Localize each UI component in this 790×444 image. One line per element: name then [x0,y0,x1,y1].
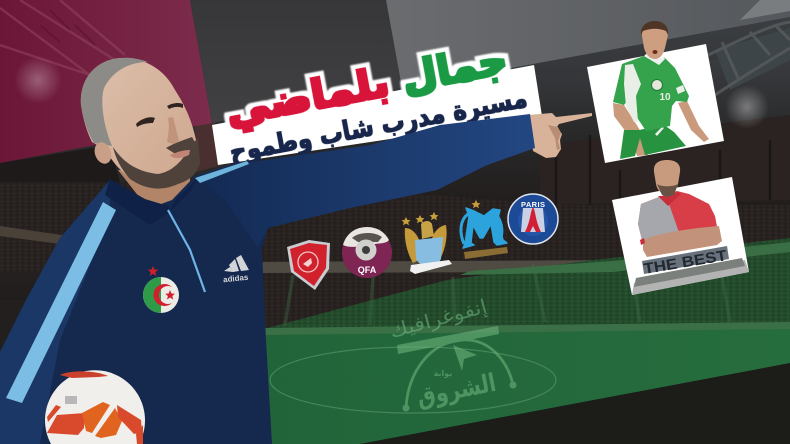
logo: Marseille [461,200,508,259]
head [654,160,680,195]
ear [92,140,114,166]
beard [113,138,200,189]
pitch dark corner [360,363,790,444]
head [81,58,200,189]
panel: light grey band and roof [386,0,790,129]
hair [81,58,148,146]
badge: Algeria [143,277,179,313]
pitch [262,327,790,444]
photo: young player in green: 10 [659,92,671,103]
moustache [166,137,197,155]
upper stands [0,17,790,328]
label THE BEST: THE BEST [642,247,728,278]
figure: coach [0,58,592,444]
watermark logo: إنفوغرافيك [387,296,490,344]
logo: PSG: PARIS [521,200,545,209]
zipper [168,210,205,292]
logo: QFA: QFA [358,265,377,275]
head [642,22,668,59]
panel: maroon corner [0,0,212,163]
badge star [148,266,158,276]
collar [105,179,170,225]
jacket body and arm [0,114,535,444]
adidas logo [223,255,249,284]
green stands [260,238,790,330]
adidas logo: adidas [223,273,249,284]
neck [118,168,190,218]
logo: Al Duhail shield [287,240,330,290]
ball [45,370,145,444]
title: red word: بلماضي [222,60,393,135]
shirt [613,56,689,131]
watermark logo: الشروق [414,368,499,413]
player arms [613,103,648,156]
hand [528,113,592,158]
photo: young player in green [587,21,724,163]
base [632,260,749,295]
arm stripe [195,161,249,183]
subtitle: مسيرة مدرب شاب وطموح [227,83,530,168]
logo: Manchester City [402,212,452,274]
eyes [136,103,183,127]
arms [643,226,722,257]
pitch circle [270,347,556,413]
photo: coach in red polo [612,160,749,295]
logo: PSG [508,194,558,244]
torso [638,191,718,244]
title: green word: جمال [398,37,511,101]
watermark logo: بوابة [434,369,452,378]
logo: QFA [342,227,392,278]
shoulder stripe [6,202,116,403]
watermark logo [387,296,516,413]
panel: dark grey band [190,0,402,123]
shorts [620,125,686,159]
banner: white title plate [212,65,542,165]
